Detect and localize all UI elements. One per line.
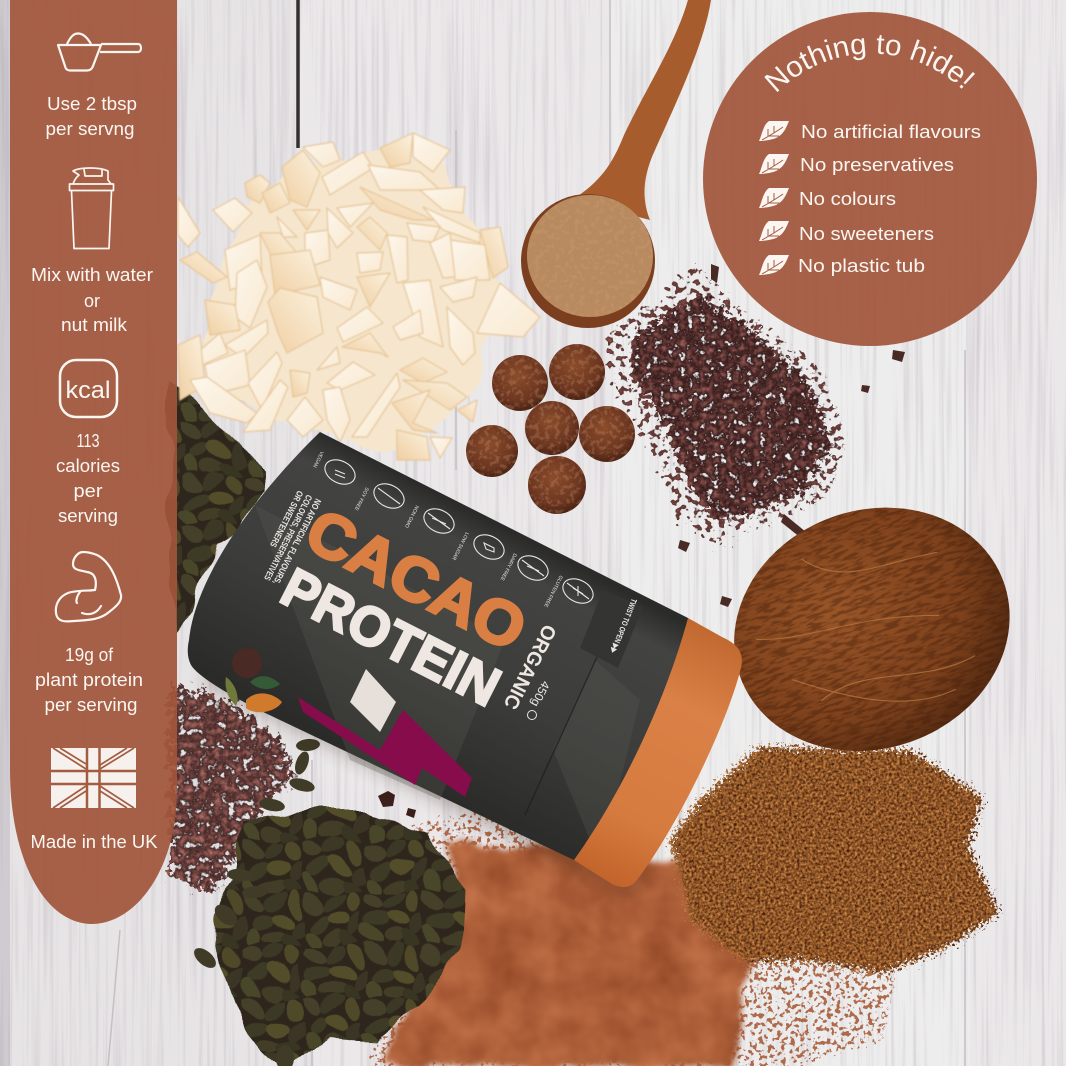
- powder dust around cocoa: [375, 810, 900, 1066]
- diet badges: [321, 455, 597, 608]
- product name: protein: PROTEIN: [272, 556, 510, 718]
- curved heading: Nothing to hide!: [764, 35, 975, 92]
- text: calories: 113: [76, 431, 100, 451]
- text: mixing: nut milk: [61, 315, 128, 335]
- text: scoop: [46, 94, 137, 139]
- badge labels: [311, 450, 564, 609]
- text: origin: Made in the UK: [30, 832, 158, 852]
- text: mixing: or: [84, 291, 100, 311]
- text: calories: calories: [56, 456, 120, 476]
- text: protein: 19g of: [65, 645, 114, 665]
- powder pile: cocoa: [385, 840, 770, 1066]
- cacao nibs: main pile: [612, 264, 905, 607]
- twist tab: [580, 590, 643, 668]
- circle background: [703, 12, 1037, 346]
- twist to open text: TWIST TO OPEN ▶▶: [608, 597, 638, 655]
- panel: usage sidebar: [10, 0, 177, 924]
- icon: UK flag: [51, 748, 136, 808]
- panel: nothing to hide circle: [703, 12, 1037, 346]
- product name: cacao: CACAO: [295, 496, 537, 665]
- tub lid seam: [525, 657, 597, 815]
- ingredient illustration: [225, 648, 282, 712]
- badge labels: SOY FREE: [352, 486, 370, 512]
- list item: colours: No colours: [799, 189, 896, 209]
- powder pile: coconut sugar: [670, 747, 999, 973]
- icon: shaker bottle: [70, 168, 114, 248]
- cacao nibs: lower left pile: [170, 685, 295, 895]
- tub body: [188, 432, 704, 860]
- pumpkin seeds: upper left pile: [170, 380, 265, 630]
- cacao truffles: [466, 344, 635, 514]
- badge labels: LOW SUGAR: [450, 531, 470, 561]
- text: scoop: per servng: [46, 119, 134, 139]
- coconut flakes pile: [178, 133, 540, 460]
- product tub: Cacao Protein: [188, 432, 742, 887]
- sidebar background: [10, 0, 177, 924]
- coconut: [700, 470, 1044, 789]
- tub orange cap: [574, 618, 742, 887]
- badge labels: NON GMO: [403, 504, 420, 529]
- claims text: OR SWEETENERS: [268, 489, 305, 549]
- text: protein: per serving: [44, 695, 138, 715]
- list item: colours: [759, 188, 896, 209]
- list item: preservatives: No preservatives: [800, 155, 954, 175]
- list item: sweeteners: [759, 221, 934, 244]
- recycling mark: [528, 710, 536, 720]
- text: protein: plant protein: [35, 670, 143, 690]
- icon: flexed arm: [56, 552, 121, 621]
- text: calories: per: [74, 481, 103, 501]
- white diamond: [350, 669, 396, 732]
- curve guide: [776, 54, 965, 94]
- list item: sweeteners: No sweeteners: [799, 224, 934, 244]
- tub label facets: [255, 505, 640, 840]
- tub shadow: [200, 660, 650, 895]
- icon: kcal badge: [60, 360, 117, 417]
- text: mixing: [31, 265, 153, 335]
- list item: artificial flavours: No artificial flavours: [801, 122, 981, 142]
- badge labels: GLUTEN FREE: [542, 574, 564, 609]
- icon: kcal badge: kcal: [66, 377, 110, 404]
- organic label: ORGANIC: [499, 621, 560, 713]
- badge labels: VEGAN: [311, 450, 325, 469]
- magenta shape: [298, 697, 472, 797]
- net weight: 450g: [528, 679, 553, 709]
- text: calories: [56, 431, 120, 526]
- list item: plastic tub: [759, 255, 925, 276]
- text: scoop: Use 2 tbsp: [47, 94, 137, 114]
- list item: plastic tub: No plastic tub: [798, 256, 925, 276]
- list item: artificial flavours: [759, 121, 981, 142]
- claims text: COLOURS, PRESERVATIVES: [262, 493, 314, 582]
- badge labels: DAIRY FREE: [498, 552, 518, 582]
- text: calories: serving: [58, 506, 118, 526]
- claims text: NO ARTIFICIAL FLAVOURS,: [271, 497, 323, 586]
- text: mixing: Mix with water: [31, 265, 153, 285]
- icon: measuring scoop: [58, 34, 141, 70]
- list item: preservatives: [759, 154, 954, 175]
- wooden spoon with protein powder: [521, 0, 711, 328]
- text: protein: [35, 645, 143, 715]
- pumpkin seeds: lower pile: [191, 738, 463, 1066]
